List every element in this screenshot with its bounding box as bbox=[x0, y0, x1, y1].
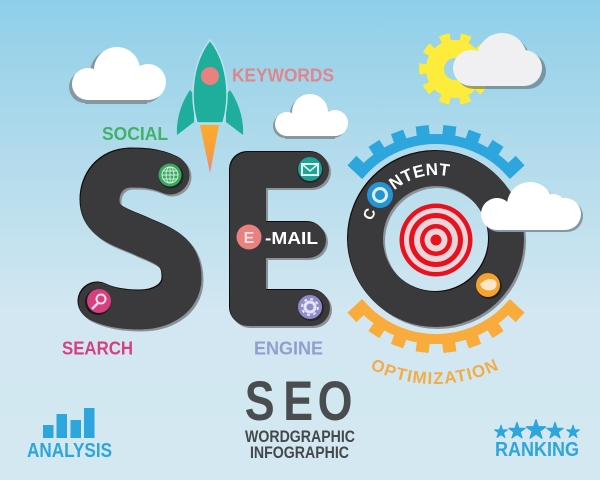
icon: bar chart bbox=[43, 408, 94, 438]
icon: mail bbox=[297, 157, 323, 183]
icon: rating stars bbox=[495, 420, 579, 438]
letter E bbox=[247, 169, 314, 310]
icon: globe bbox=[158, 164, 184, 188]
label: -mail: -MAIL bbox=[265, 228, 318, 248]
orange gear bbox=[347, 299, 525, 353]
rocket fins bbox=[177, 90, 243, 135]
label: keywords: KEYWORDS bbox=[232, 64, 334, 86]
heading: SEO: SEO bbox=[245, 369, 352, 432]
label: ranking: RANKING bbox=[495, 439, 579, 461]
label: content bbox=[360, 163, 450, 223]
subheading: wordgraphic: WORDGRAPHIC bbox=[245, 428, 355, 446]
rocket bbox=[177, 40, 243, 173]
subheading: infographic: INFOGRAPHIC bbox=[250, 444, 349, 462]
rocket window bbox=[201, 67, 219, 85]
label: social: SOCIAL bbox=[102, 123, 168, 144]
letter O bbox=[364, 168, 508, 312]
cloud: center bbox=[273, 94, 348, 139]
label: engine: ENGINE bbox=[254, 338, 323, 358]
icon: e-mail badge: E bbox=[244, 230, 255, 247]
cloud: over sun bbox=[453, 33, 546, 89]
cloud: top left bbox=[69, 47, 166, 104]
label: optimization: OPTIMIZATION bbox=[372, 359, 498, 384]
icon: gear bbox=[298, 295, 324, 321]
icon: letter O badge bbox=[367, 182, 393, 208]
letters NTENT: NTENT bbox=[388, 163, 450, 190]
icon: orange swirl bbox=[476, 273, 502, 299]
blue gear bbox=[347, 125, 525, 179]
icon: search bbox=[85, 289, 111, 315]
sun gear bbox=[422, 36, 488, 102]
rocket body bbox=[193, 40, 227, 123]
target bbox=[400, 204, 472, 276]
label: analysis: ANALYSIS bbox=[27, 440, 112, 462]
letter S bbox=[97, 167, 184, 312]
icon: e-mail badge bbox=[236, 224, 262, 250]
cloud: right bbox=[481, 182, 583, 232]
label: search: SEARCH bbox=[62, 338, 133, 358]
letter C: C bbox=[360, 206, 380, 223]
rocket flame bbox=[200, 125, 219, 173]
